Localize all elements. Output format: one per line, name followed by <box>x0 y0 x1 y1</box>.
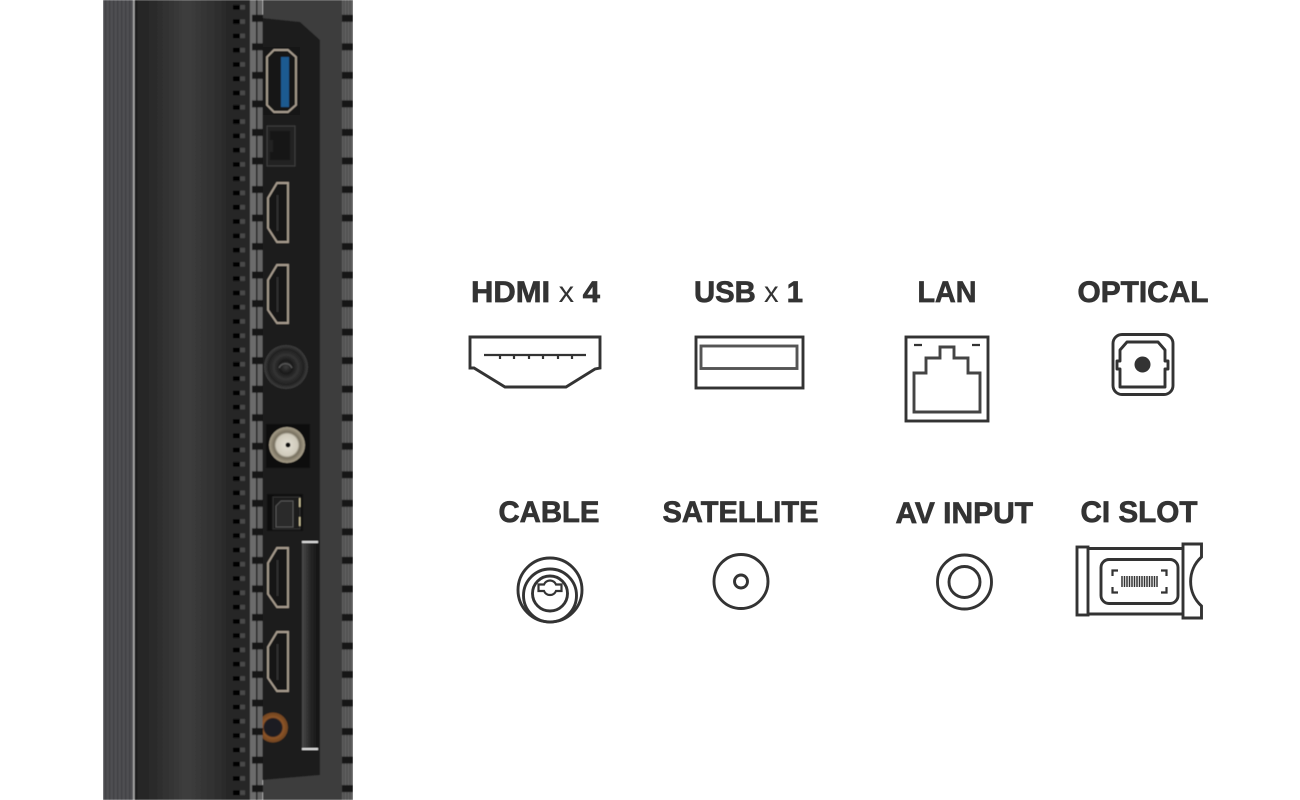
port: HDMI 1 <box>268 183 288 242</box>
label: USB x 1: USB x 1 <box>694 276 803 309</box>
inner strip <box>258 0 262 800</box>
side notches <box>252 0 353 800</box>
icon: USB <box>696 337 803 388</box>
label: AV INPUT: AV INPUT <box>896 497 1033 530</box>
port: optical <box>267 494 303 531</box>
port: LAN <box>267 126 295 166</box>
bezel <box>103 0 134 800</box>
port panel <box>262 18 320 780</box>
icon: optical <box>1113 334 1173 394</box>
port: HDMI 2 <box>268 265 288 323</box>
label: CABLE: CABLE <box>498 496 600 529</box>
icon: HDMI <box>470 337 600 387</box>
icon: CI slot <box>1077 544 1202 618</box>
port: AV <box>258 712 288 742</box>
port: CI slot <box>302 541 319 750</box>
label: SATELLITE: SATELLITE <box>662 496 818 529</box>
port: USB <box>263 47 300 115</box>
vent strip <box>226 0 250 800</box>
label: HDMI x 4: HDMI x 4 <box>471 276 600 309</box>
rear body <box>137 0 227 800</box>
icon: cable <box>518 558 582 622</box>
port: HDMI 3 <box>268 548 288 607</box>
port: cable <box>264 345 308 389</box>
port: satellite <box>266 424 310 468</box>
icon: LAN <box>906 337 988 421</box>
label: CI SLOT: CI SLOT <box>1080 496 1198 529</box>
icon: AV input <box>938 555 992 609</box>
port: HDMI 4 <box>268 632 288 691</box>
label: LAN: LAN <box>918 276 976 309</box>
label: OPTICAL: OPTICAL <box>1078 276 1208 309</box>
TV side panel photo <box>103 0 353 800</box>
icon: satellite <box>714 554 768 608</box>
